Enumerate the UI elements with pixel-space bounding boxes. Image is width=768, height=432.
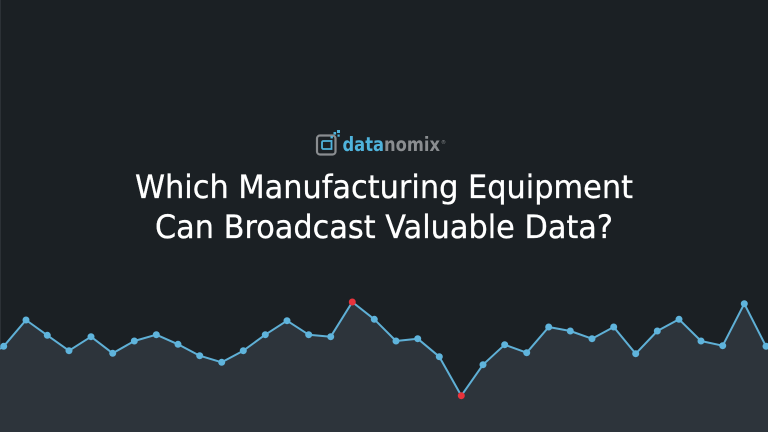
- highlighted points: [349, 298, 465, 399]
- area chart fill: [0, 302, 768, 432]
- data points: [0, 300, 768, 368]
- title line 2: Can Broadcast Valuable Data?: [155, 208, 613, 246]
- title line 1: Which Manufacturing Equipment: [135, 168, 633, 206]
- data line: [0, 302, 768, 396]
- title: [135, 168, 633, 246]
- logo: datanomix: [317, 130, 446, 156]
- icon: data square: [317, 130, 340, 154]
- registered mark: ®: [441, 139, 446, 146]
- line chart: [0, 298, 768, 399]
- wordmark: datanomix: [342, 133, 440, 156]
